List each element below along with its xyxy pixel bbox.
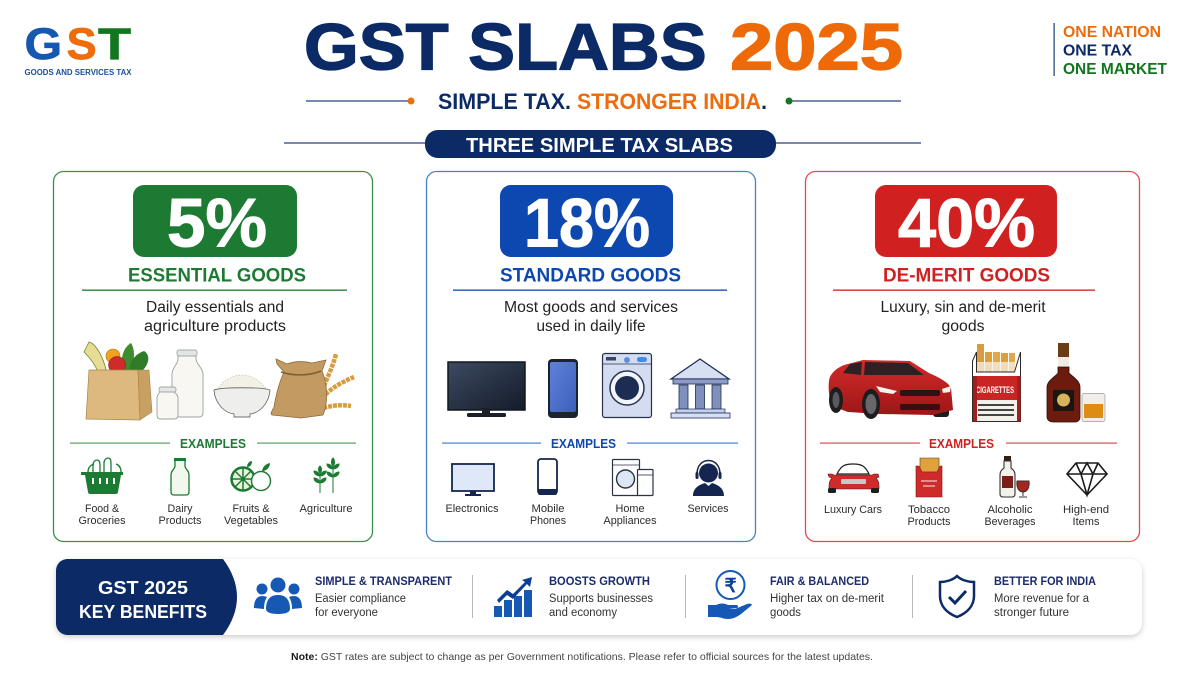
icon: basket, food and groceries bbox=[81, 458, 123, 494]
examples divider: EXAMPLES bbox=[551, 436, 616, 451]
label: mobile phones bbox=[530, 503, 566, 527]
subtitle: SIMPLE TAX. bbox=[438, 89, 571, 114]
illustration: government building bbox=[671, 359, 730, 418]
text: fair and balanced bbox=[770, 574, 885, 619]
icon: rupee in hand: ₹ bbox=[724, 576, 737, 597]
label: high-end items bbox=[1063, 504, 1109, 528]
label: food and groceries bbox=[78, 503, 126, 527]
subtitle bbox=[306, 89, 901, 114]
icon: shield with check bbox=[940, 576, 974, 617]
illustration: grain sack and wheat bbox=[271, 354, 354, 418]
heading: GST 2025 key benefits: KEY BENEFITS bbox=[79, 601, 207, 622]
panel: key benefits bar bbox=[56, 559, 1142, 635]
label: dairy products bbox=[158, 503, 202, 527]
text: better for India: stronger future bbox=[994, 607, 1069, 619]
subtitle: STRONGER INDIA bbox=[577, 89, 761, 114]
section heading: three simple tax slabs bbox=[284, 130, 921, 158]
label: luxury cars: Luxury Cars bbox=[824, 504, 882, 516]
icon: home appliances bbox=[612, 460, 653, 496]
illustration: cigarette pack: CIGARETTES bbox=[976, 385, 1014, 396]
examples divider: EXAMPLES bbox=[180, 436, 246, 451]
label: tobacco products bbox=[908, 504, 951, 528]
label: dairy products: Products bbox=[158, 515, 202, 527]
illustration: grocery bag with vegetables bbox=[84, 342, 152, 420]
label: high-end items: High-end bbox=[1063, 504, 1109, 516]
text: boosts growth: Supports businesses bbox=[549, 593, 653, 605]
illustration: bowl of rice bbox=[214, 375, 270, 417]
logo: GST goods and services tax: T bbox=[98, 20, 131, 69]
label: electronics: Electronics bbox=[446, 503, 499, 515]
label: home appliances: Appliances bbox=[604, 515, 657, 527]
title: 2025 bbox=[730, 11, 903, 84]
title: GST SLABS bbox=[304, 11, 707, 84]
label: agriculture: Agriculture bbox=[300, 503, 352, 515]
tagline: one nation one tax one market: ONE NATION bbox=[1063, 24, 1161, 41]
title bbox=[304, 11, 903, 84]
label: tobacco products: Tobacco bbox=[908, 504, 950, 516]
description: Most goods and services bbox=[504, 299, 678, 316]
description bbox=[144, 299, 286, 335]
logo: GST goods and services tax: G bbox=[24, 19, 62, 69]
subtitle: . bbox=[761, 89, 767, 114]
label: alcoholic beverages: Alcoholic bbox=[988, 504, 1033, 516]
text: boosts growth: and economy bbox=[549, 607, 617, 619]
text: better for India: More revenue for a bbox=[994, 593, 1090, 605]
examples divider: EXAMPLES bbox=[929, 436, 994, 451]
label: tobacco products: Products bbox=[908, 516, 951, 528]
footnote: Note: GST rates are subject to change as per Government notifications. Please refer to official sources for the latest updates. bbox=[291, 651, 873, 663]
section heading: three simple tax slabs: THREE SIMPLE TAX SLABS bbox=[466, 134, 733, 157]
rate badge: 18%: 18% bbox=[524, 184, 650, 261]
label: services: Services bbox=[688, 503, 729, 515]
text: better for India bbox=[994, 574, 1096, 619]
logo: GST goods and services tax: GOODS AND SERVICES TAX bbox=[24, 67, 132, 77]
illustration: washing machine bbox=[602, 354, 652, 418]
panel: 5% essential goods bbox=[54, 172, 372, 542]
label: home appliances bbox=[604, 503, 657, 527]
label: mobile phones: Mobile bbox=[532, 503, 564, 515]
icon: tobacco pack bbox=[916, 458, 942, 497]
heading: de-merit goods: DE-MERIT GOODS bbox=[883, 264, 1050, 286]
label: food and groceries: Food & bbox=[85, 503, 120, 515]
text: better for India: BETTER FOR INDIA bbox=[994, 574, 1096, 588]
description: agriculture products bbox=[144, 318, 286, 335]
icon: rupee in hand bbox=[708, 571, 752, 619]
text: boosts growth bbox=[549, 574, 653, 619]
heading: GST 2025 key benefits bbox=[56, 559, 237, 635]
rate badge: 40%: 40% bbox=[898, 184, 1035, 262]
icon: mobile phone bbox=[538, 459, 557, 495]
icon: luxury car bbox=[828, 464, 879, 493]
description: goods bbox=[942, 318, 985, 335]
panel: 18% standard goods bbox=[426, 172, 756, 542]
label: high-end items: Items bbox=[1072, 516, 1100, 528]
rate badge: 5%: 5% bbox=[167, 185, 267, 261]
label: home appliances: Home bbox=[616, 503, 644, 515]
logo: GST goods and services tax bbox=[24, 19, 132, 77]
description: Daily essentials and bbox=[146, 299, 284, 316]
panel: 40% de-merit goods bbox=[806, 172, 1140, 542]
icon: agriculture wheat bbox=[314, 458, 339, 493]
text: simple and transparent bbox=[315, 574, 453, 619]
label: alcoholic beverages: Beverages bbox=[984, 516, 1036, 528]
tagline: one nation one tax one market: ONE MARKET bbox=[1063, 61, 1168, 78]
description bbox=[504, 299, 678, 335]
text: simple and transparent: for everyone bbox=[315, 607, 378, 619]
tagline: one nation one tax one market: ONE TAX bbox=[1063, 42, 1133, 60]
text: simple and transparent: SIMPLE & TRANSPARENT bbox=[315, 574, 453, 588]
text: simple and transparent: Easier compliance bbox=[315, 593, 406, 605]
icon: alcoholic beverages bbox=[1000, 456, 1029, 497]
text: fair and balanced: Higher tax on de-merit bbox=[770, 593, 885, 605]
heading: GST 2025 key benefits: GST 2025 bbox=[98, 577, 188, 598]
label: mobile phones: Phones bbox=[530, 515, 566, 527]
text: boosts growth: BOOSTS GROWTH bbox=[549, 574, 650, 588]
text: fair and balanced: goods bbox=[770, 607, 801, 619]
illustration: smartphone bbox=[548, 359, 578, 418]
illustration: milk bottle and jar bbox=[157, 350, 203, 419]
label: alcoholic beverages bbox=[984, 504, 1036, 528]
icon: electronics monitor bbox=[452, 464, 494, 496]
label: fruits and vegetables bbox=[224, 503, 278, 527]
icon: dairy bottle bbox=[171, 458, 189, 495]
illustration: cigarette pack bbox=[972, 344, 1020, 422]
icon: services headset person bbox=[693, 460, 724, 496]
label: food and groceries: Groceries bbox=[78, 515, 126, 527]
label: fruits and vegetables: Vegetables bbox=[224, 515, 278, 527]
text: fair and balanced: FAIR & BALANCED bbox=[770, 574, 869, 588]
description bbox=[880, 299, 1046, 335]
icon: diamond high-end items bbox=[1067, 463, 1107, 495]
icon: fruits and vegetables bbox=[232, 461, 270, 490]
illustration: liquor bottle and glass bbox=[1047, 343, 1105, 422]
heading: essential goods: ESSENTIAL GOODS bbox=[128, 264, 306, 286]
heading: standard goods: STANDARD GOODS bbox=[500, 264, 681, 286]
description: used in daily life bbox=[536, 318, 646, 335]
rate badge: 5% bbox=[133, 185, 297, 261]
illustration: television bbox=[448, 362, 525, 417]
label: dairy products: Dairy bbox=[168, 503, 193, 515]
logo: GST goods and services tax: S bbox=[66, 20, 97, 69]
tagline: one nation one tax one market bbox=[1054, 23, 1168, 78]
illustration: red luxury car bbox=[829, 360, 953, 419]
icon: people bbox=[254, 578, 302, 614]
description: Luxury, sin and de-merit bbox=[880, 299, 1046, 316]
label: fruits and vegetables: Fruits & bbox=[232, 503, 270, 515]
icon: growth chart bbox=[494, 577, 532, 617]
